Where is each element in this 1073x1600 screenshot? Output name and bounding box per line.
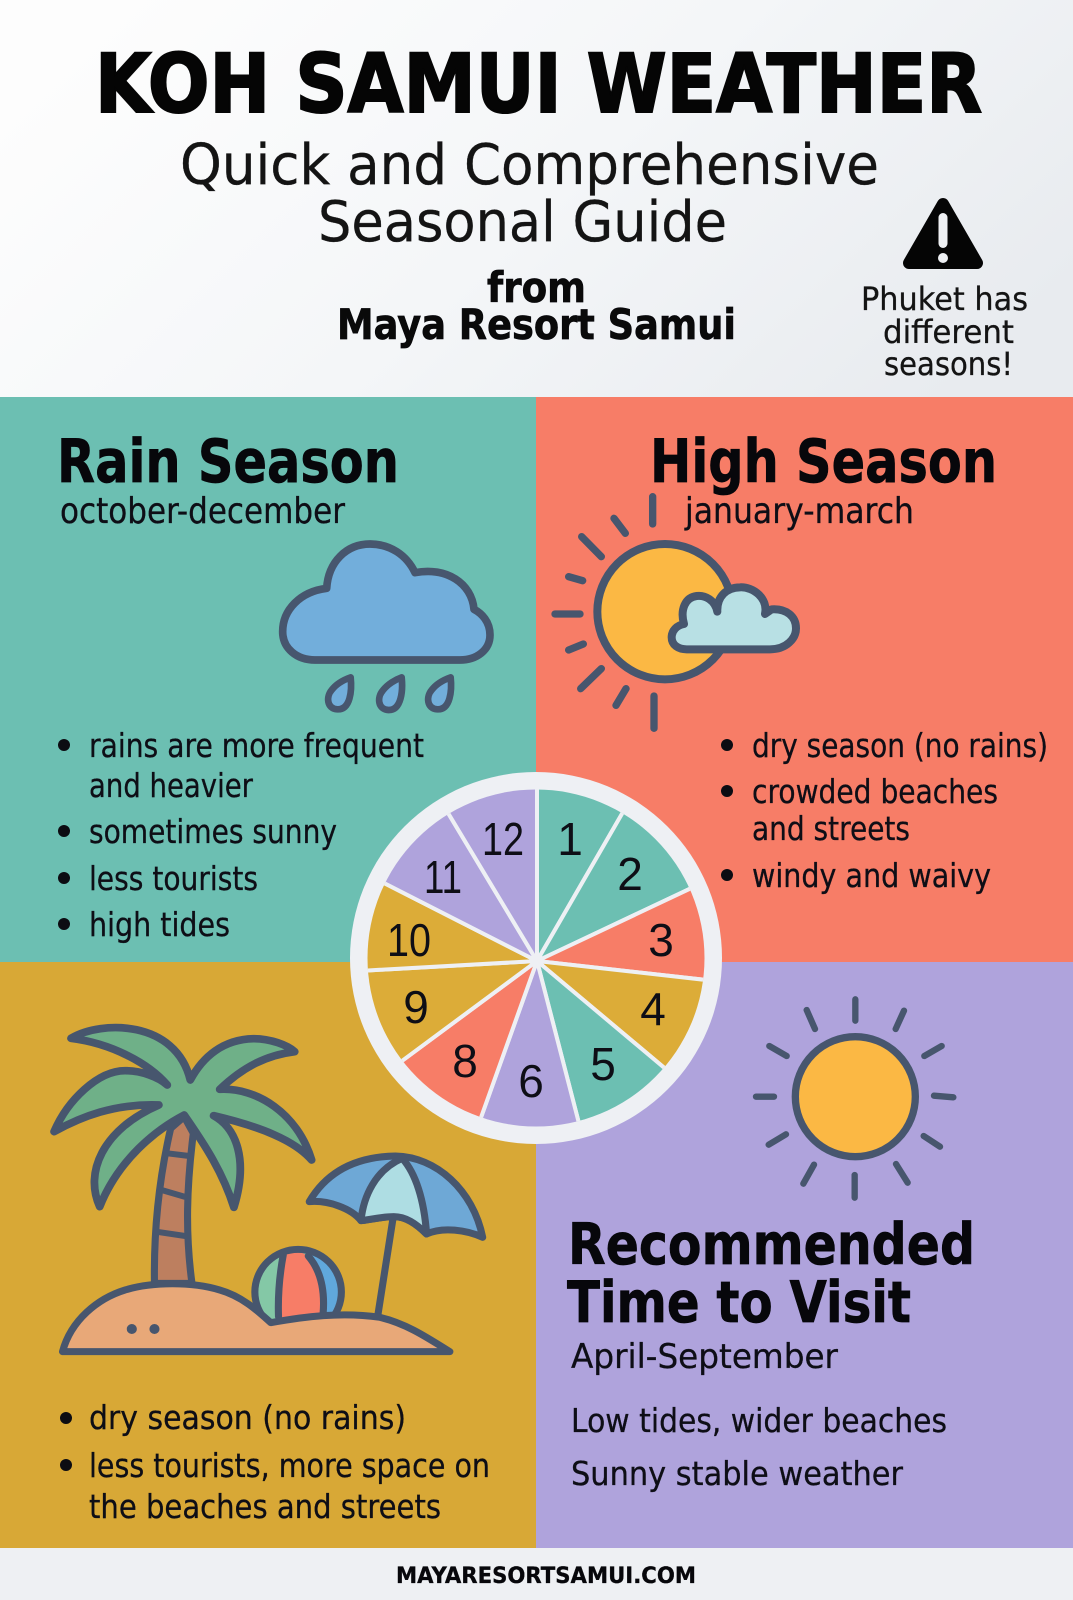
months: october-december: october-december — [60, 491, 345, 532]
footer — [0, 1548, 1073, 1600]
month numbers: 3 — [648, 914, 674, 966]
months: january-march: january-march — [684, 491, 914, 532]
warning note — [861, 280, 1028, 383]
month numbers: 12 — [482, 813, 524, 865]
list: rain season: and heavier — [89, 766, 253, 805]
month numbers — [387, 813, 674, 1107]
panel: recommended time — [536, 962, 1073, 1548]
recommended notes: Sunny stable weather — [571, 1454, 903, 1493]
list: low season: dry season (no rains) — [89, 1398, 406, 1437]
month numbers: 6 — [518, 1055, 544, 1107]
list: low season: less tourists, more space on — [89, 1446, 490, 1485]
icon: palm tree island with umbrella and ball — [54, 1028, 483, 1352]
panel: high season — [536, 397, 1073, 962]
panel: low season — [0, 962, 536, 1548]
month numbers: 10 — [387, 914, 431, 966]
byline: from — [487, 263, 586, 312]
chart: month wheel — [350, 772, 722, 1144]
month numbers: 5 — [590, 1038, 616, 1090]
subtitle — [180, 133, 879, 255]
header panel — [0, 0, 1073, 398]
list: low season — [60, 1398, 490, 1526]
icon: warning triangle — [909, 204, 977, 263]
heading: recommended time to visit: Time to Visit — [567, 1270, 911, 1336]
icon: rain cloud — [283, 544, 490, 710]
icon: sun — [756, 999, 953, 1198]
subtitle: Seasonal Guide — [318, 190, 727, 255]
heading: recommended time to visit: Recommended — [568, 1212, 975, 1278]
beach ball — [255, 1249, 341, 1335]
list: high season: windy and waivy — [752, 856, 991, 895]
warning note: seasons! — [884, 345, 1013, 383]
fronds — [54, 1028, 312, 1207]
recommended notes — [571, 1401, 947, 1493]
list: rain season: sometimes sunny — [89, 812, 337, 851]
list: high season: and streets — [752, 809, 910, 848]
list: rain season: high tides — [89, 905, 230, 944]
list: rain season: less tourists — [89, 859, 258, 898]
list: high season: crowded beaches — [752, 772, 998, 811]
month numbers: 2 — [617, 848, 643, 900]
trunk — [154, 1117, 193, 1283]
month numbers: 4 — [640, 983, 666, 1035]
list: rain season: rains are more frequent — [89, 726, 424, 765]
byline — [337, 263, 736, 349]
months: april-september: April-September — [571, 1337, 838, 1377]
list: high season — [721, 726, 1048, 895]
panel: rain season — [0, 397, 536, 962]
month numbers: 9 — [403, 981, 429, 1033]
warning note: Phuket has — [861, 280, 1028, 318]
icon: sun behind cloud — [555, 497, 796, 728]
month numbers: 1 — [557, 813, 583, 865]
month numbers: 11 — [424, 851, 462, 903]
recommended notes: Low tides, wider beaches — [571, 1401, 947, 1440]
title: KOH SAMUI WEATHER — [95, 38, 982, 132]
warning note: different — [883, 313, 1014, 351]
heading: recommended time to visit — [567, 1212, 975, 1336]
list: low season: the beaches and streets — [89, 1487, 441, 1526]
byline: Maya Resort Samui — [337, 300, 736, 349]
list: rain season — [58, 726, 424, 944]
umbrella — [378, 1220, 393, 1315]
month numbers: 8 — [452, 1035, 478, 1087]
footer: MAYARESORTSAMUI.COM — [396, 1564, 696, 1589]
island — [63, 1284, 450, 1352]
subtitle: Quick and Comprehensive — [180, 133, 879, 198]
heading: high season: High Season — [650, 427, 997, 497]
heading: rain season: Rain Season — [57, 427, 399, 497]
